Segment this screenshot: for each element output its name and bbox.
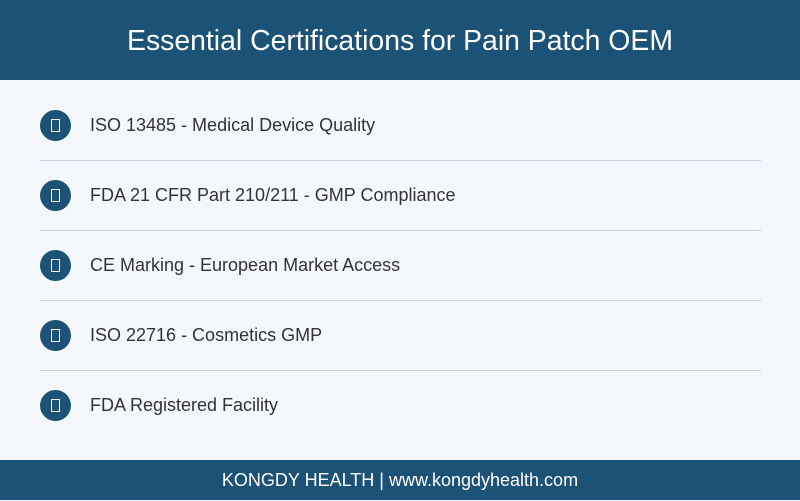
footer: KONGDY HEALTH | www.kongdyhealth.com: [222, 470, 578, 490]
item: ISO 22716: ISO 22716 - Cosmetics GMP: [90, 325, 322, 345]
title: Essential Certifications for Pain Patch OEM: [127, 25, 673, 57]
item: ISO 13485: [40, 110, 376, 141]
item: FDA 21 CFR: FDA 21 CFR Part 210/211 - GMP Compliance: [90, 185, 455, 205]
footer: [0, 460, 800, 500]
item: FDA Registered: FDA Registered Facility: [90, 395, 278, 415]
item: FDA Registered: [40, 390, 278, 421]
item: FDA 21 CFR: [40, 180, 455, 211]
item: ISO 22716: [40, 320, 322, 351]
item: CE Marking: CE Marking - European Market Access: [90, 255, 400, 275]
title: [0, 0, 800, 80]
item: ISO 13485: ISO 13485 - Medical Device Quality: [90, 115, 375, 135]
item: CE Marking: [40, 250, 400, 281]
